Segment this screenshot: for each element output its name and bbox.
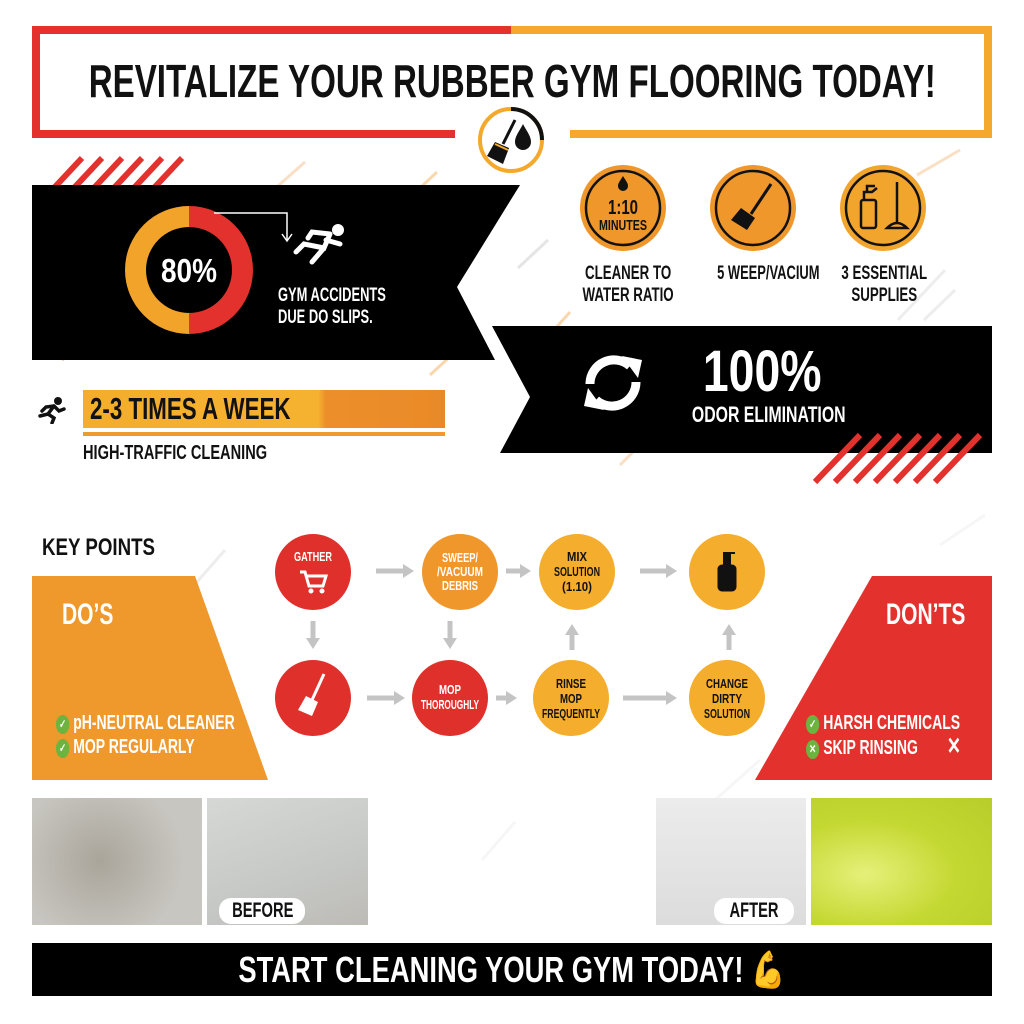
icon: broom <box>710 165 796 251</box>
footer banner: START CLEANING YOUR GYM TODAY! 💪 <box>239 949 785 990</box>
don'ts content: HARSH CHEMICALS <box>823 712 960 734</box>
step: mop: THOROUGHLY <box>421 697 479 712</box>
label: supplies: 3 ESSENTIAL <box>841 263 927 284</box>
step: sweep <box>422 534 498 610</box>
step: sweep: DEBRIS <box>442 578 478 593</box>
do's content <box>56 598 235 758</box>
label: after <box>714 898 794 924</box>
text: high-traffic cleaning: HIGH-TRAFFIC CLEANING <box>83 442 267 464</box>
icon: supplies <box>840 165 926 251</box>
step: change: DIRTY <box>712 691 742 706</box>
step: sweep: SWEEP/ <box>442 550 478 565</box>
label: sweep: 5 WEEP/VACIUM <box>717 263 820 284</box>
hazard stripes bottom-right <box>815 435 980 482</box>
text: gym accidents <box>278 285 386 328</box>
don'ts content: SKIP RINSING ✕ <box>823 733 961 760</box>
label: after: AFTER <box>730 899 778 922</box>
step: rinse: MOP <box>560 691 582 706</box>
left black banner <box>32 185 520 360</box>
donut chart 80% <box>125 206 253 334</box>
step: gather <box>275 534 351 610</box>
icon: broom and drop <box>478 107 544 173</box>
icon: ratio 1:10: MINUTES <box>599 217 647 234</box>
frequency bar <box>83 390 445 436</box>
step: mix <box>539 534 615 610</box>
arrow to slip icon <box>214 212 293 242</box>
step: broom <box>275 660 351 736</box>
text: gym accidents: DUE DO SLIPS. <box>278 307 373 328</box>
decorative diagonal lines <box>62 150 985 860</box>
flowchart <box>275 534 765 736</box>
step: rinse: FREQUENTLY <box>542 706 600 721</box>
step: rinse: RINSE <box>556 676 586 691</box>
text: gym accidents: GYM ACCIDENTS <box>278 285 386 306</box>
stat: 100% odor <box>692 339 846 427</box>
label: supplies: SUPPLIES <box>851 285 917 306</box>
don'ts content: DON’TS <box>886 598 965 631</box>
label: before: BEFORE <box>232 899 293 922</box>
step: mop <box>412 660 488 736</box>
don'ts content <box>806 598 965 760</box>
step: mix: SOLUTION <box>554 564 600 579</box>
step: change: CHANGE <box>706 676 748 691</box>
after photos <box>656 798 992 925</box>
icon: refresh <box>584 355 642 411</box>
step: mix: MIX <box>567 549 587 564</box>
step: sweep: /VACUUM <box>437 564 483 579</box>
label: cleaner ratio <box>582 263 674 306</box>
step: gather: GATHER <box>294 549 332 564</box>
step: rinse <box>533 660 609 736</box>
hazard stripes top-left <box>38 158 182 205</box>
donut chart 80%: 80% <box>161 252 217 289</box>
stat: 100% odor: ODOR ELIMINATION <box>692 402 846 427</box>
label: before <box>219 898 305 924</box>
before photos <box>32 798 368 925</box>
icon: slipping person <box>294 224 344 264</box>
right black banner <box>492 326 992 453</box>
icon: runner <box>38 397 66 424</box>
step: change: SOLUTION <box>704 706 750 721</box>
icon: ratio 1:10: 1:10 <box>608 197 638 219</box>
stat: 100% odor: 100% <box>703 339 821 404</box>
do's content: ✓ <box>59 717 66 731</box>
frequency bar: 2-3 TIMES A WEEK <box>90 391 290 426</box>
don'ts content: ✕ <box>809 742 816 756</box>
title: REVITALIZE YOUR RUBBER GYM FLOORING TODAY! <box>88 55 936 107</box>
do's panel <box>32 576 268 780</box>
footer banner <box>32 943 992 996</box>
label: cleaner ratio: CLEANER TO <box>585 263 671 284</box>
do's content: ✓ <box>59 741 66 755</box>
icon: ratio 1:10 <box>580 165 666 251</box>
don'ts panel <box>755 576 992 780</box>
step: mix: (1.10) <box>562 579 592 594</box>
label: cleaner ratio: WATER RATIO <box>583 285 674 306</box>
do's content: MOP REGULARLY <box>73 736 195 758</box>
do's content: pH-NEUTRAL CLEANER <box>73 712 235 734</box>
heading: key points: KEY POINTS <box>42 534 155 561</box>
label: supplies <box>841 263 927 306</box>
header frame <box>36 30 988 134</box>
step: change <box>689 660 765 736</box>
step: bottle <box>689 534 765 610</box>
step: mop: MOP <box>439 682 461 697</box>
don'ts content: ✓ <box>809 717 816 731</box>
flow arrows <box>306 564 736 705</box>
do's content: DO’S <box>62 598 113 631</box>
